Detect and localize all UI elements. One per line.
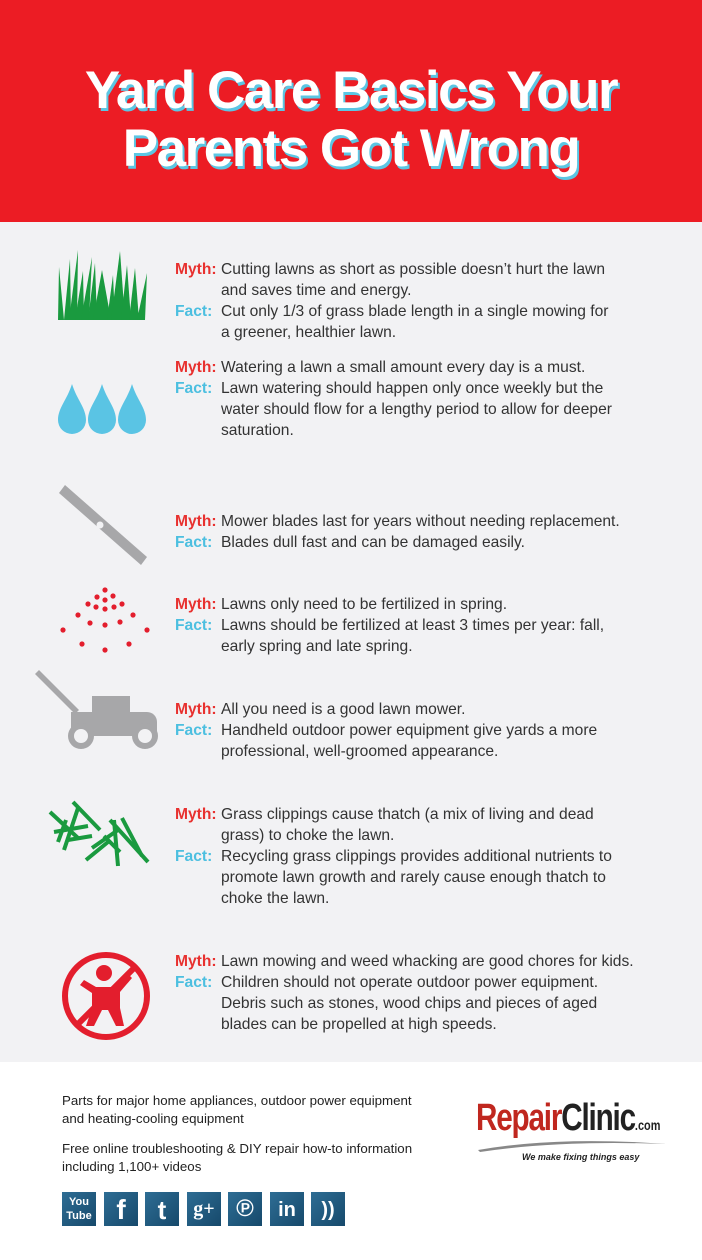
social icons [62, 1192, 345, 1226]
icon: water drops [58, 384, 146, 434]
row 6 text: Recycling grass clippings provides additional nutrients to [221, 848, 612, 865]
row 7 text: blades can be propelled at high speeds. [221, 1016, 497, 1033]
icon: grass clippings [48, 800, 150, 866]
row 4 text: Fact: [175, 617, 212, 634]
row 1 text: Fact: [175, 303, 212, 320]
footer text: parts: and heating-cooling equipment [62, 1111, 244, 1126]
social icons: )) [321, 1199, 335, 1221]
row 4 text: early spring and late spring. [221, 638, 413, 655]
social icons: g+ [193, 1198, 215, 1220]
icon: no kids sign [62, 952, 150, 1040]
logo: RepairClinic: RepairClinic.com [476, 1097, 660, 1139]
icon: mower blade [59, 485, 147, 565]
row 3 text: Mower blades last for years without needing replacement. [221, 513, 620, 530]
row 3 text [175, 513, 620, 551]
row 2 text: Myth: [175, 359, 217, 376]
row 4 text: Lawns only need to be fertilized in spring. [221, 596, 507, 613]
row 1 text: a greener, healthier lawn. [221, 324, 396, 341]
row 1 text: Cut only 1/3 of grass blade length in a single mowing for [221, 303, 608, 320]
row 6 text: choke the lawn. [221, 890, 329, 907]
row 6 text: Myth: [175, 806, 217, 823]
row 2 text: water should flow for a lengthy period to allow for deeper [221, 401, 612, 418]
icon: lawn mower [35, 670, 158, 749]
row 4 text: Lawns should be fertilized at least 3 times per year: fall, [221, 617, 604, 634]
row 6 text: grass) to choke the lawn. [221, 827, 394, 844]
row 6 text [175, 806, 612, 907]
row 1 text: Cutting lawns as short as possible doesn’t hurt the lawn [221, 261, 605, 278]
row 2 text [175, 359, 612, 439]
row 6 text: Fact: [175, 848, 212, 865]
header band [0, 0, 702, 222]
row 7 text: Myth: [175, 953, 217, 970]
social icons: f [116, 1194, 126, 1225]
row 5 text [175, 701, 597, 760]
row 3 text: Myth: [175, 513, 217, 530]
social icons: ℗ [236, 1195, 254, 1222]
row 5 text: Myth: [175, 701, 217, 718]
row 7 text: Children should not operate outdoor power equipment. [221, 974, 598, 991]
social icons: t [158, 1195, 166, 1225]
row 2 text: Watering a lawn a small amount every day is a must. [221, 359, 585, 376]
icon: grass [58, 250, 147, 320]
row 2 text: Fact: [175, 380, 212, 397]
row 3 text: Fact: [175, 534, 212, 551]
row 4 text: Myth: [175, 596, 217, 613]
footer text: troubleshooting: Free online troubleshooting & DIY repair how-to information [62, 1141, 412, 1156]
row 6 text: Grass clippings cause thatch (a mix of living and dead [221, 806, 594, 823]
title: Yard Care Basics Your [85, 61, 617, 120]
footer text: parts: Parts for major home appliances, outdoor power equipment [62, 1093, 412, 1108]
title: Parents Got Wrong [123, 119, 579, 178]
row 5 text: Handheld outdoor power equipment give yards a more [221, 722, 597, 739]
footer text: parts [62, 1093, 412, 1126]
content panel background [0, 222, 702, 1062]
logo: RepairClinic [476, 1097, 665, 1162]
icon: fertilizer dots [60, 587, 150, 653]
row 1 text: and saves time and energy. [221, 282, 411, 299]
row 7 text: Debris such as stones, wood chips and pieces of aged [221, 995, 597, 1012]
row 3 text: Blades dull fast and can be damaged easily. [221, 534, 525, 551]
footer text: troubleshooting: including 1,100+ videos [62, 1159, 201, 1174]
row 5 text: professional, well-groomed appearance. [221, 743, 498, 760]
row 5 text: Fact: [175, 722, 212, 739]
row 2 text: saturation. [221, 422, 294, 439]
social icons: Tube [66, 1210, 92, 1222]
row 7 text: Fact: [175, 974, 212, 991]
title [85, 61, 620, 180]
logo: RepairClinic: We make fixing things easy [522, 1152, 639, 1162]
social icons: in [278, 1199, 296, 1221]
social icons: You [69, 1196, 89, 1208]
row 4 text [175, 596, 604, 655]
row 7 text: Lawn mowing and weed whacking are good chores for kids. [221, 953, 634, 970]
row 7 text [175, 953, 634, 1033]
row 5 text: All you need is a good lawn mower. [221, 701, 465, 718]
row 2 text: Lawn watering should happen only once weekly but the [221, 380, 603, 397]
row 1 text [175, 261, 608, 341]
footer text: troubleshooting [62, 1141, 412, 1174]
row 6 text: promote lawn growth and rarely cause enough thatch to [221, 869, 606, 886]
row 1 text: Myth: [175, 261, 217, 278]
